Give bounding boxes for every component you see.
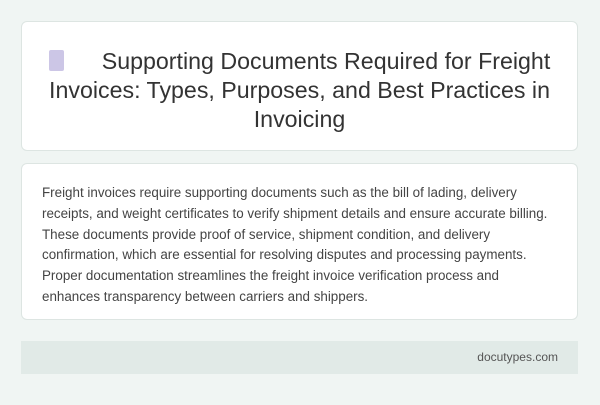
body text card xyxy=(21,163,578,320)
body text card: Freight invoices require supporting documents such as the bill of lading, delivery receipts, and weight certificates to verify shipment details and ensure accurate billing. These documents provide proof of service, shipment condition, and delivery confirmation, which are essential for resolving disputes and processing payments. Proper documentation streamlines the freight invoice verification process and enhances transparency between carriers and shippers. xyxy=(42,185,547,304)
icon: document xyxy=(49,50,64,71)
title card xyxy=(21,21,578,151)
title card: Supporting Documents Required for Freight Invoices: Types, Purposes, and Best Practices in Invoicing xyxy=(49,48,550,132)
footer xyxy=(21,341,578,374)
footer: docutypes.com xyxy=(477,350,558,364)
